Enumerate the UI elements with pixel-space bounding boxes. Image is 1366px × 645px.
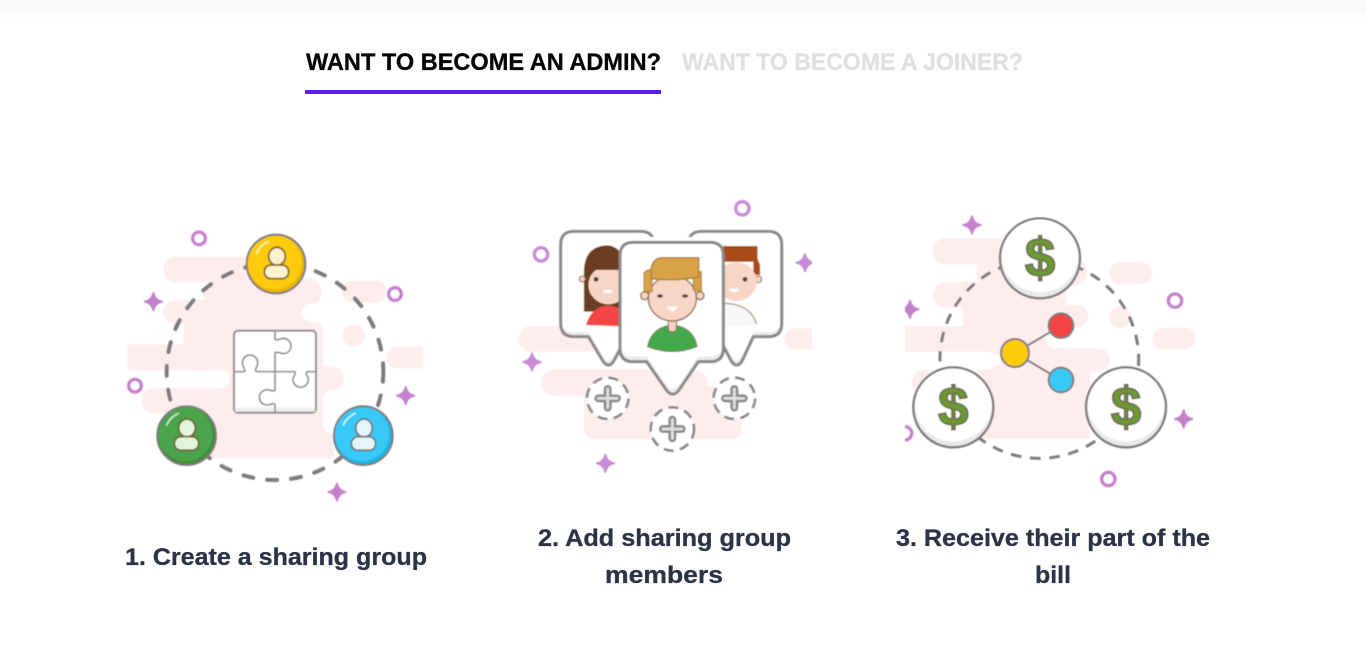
add member placeholders <box>587 378 755 451</box>
sparkles and rings <box>523 202 814 473</box>
caption: step 1: 1. Create a sharing group <box>125 544 427 571</box>
coin: right <box>1086 364 1166 447</box>
inactive tab: joiner: WANT TO BECOME A JOINER? <box>682 49 1023 76</box>
caption: step 2: members <box>605 562 723 589</box>
coin: left: $ <box>938 376 969 438</box>
caption: step 3: bill <box>1035 562 1071 589</box>
sparkles and rings <box>898 216 1193 486</box>
right speech bubble: man <box>688 227 782 365</box>
pink cloud background <box>518 326 831 439</box>
active tab underline <box>305 90 661 94</box>
caption: step 3: 3. Receive their part of the <box>896 525 1210 552</box>
avatar: green <box>157 406 216 465</box>
coin: top <box>1000 215 1080 298</box>
caption: step 2: 2. Add sharing group <box>538 525 791 552</box>
caption: step 2 <box>538 525 791 589</box>
avatar: blue <box>334 406 393 465</box>
pink cloud background <box>120 257 440 458</box>
active tab: admin: WANT TO BECOME AN ADMIN? <box>306 49 661 76</box>
coin: left <box>913 364 993 447</box>
left speech bubble: woman <box>561 227 654 365</box>
caption: step 3 <box>896 525 1210 589</box>
avatar: yellow <box>247 235 305 293</box>
coin: right: $ <box>1111 376 1141 438</box>
panel: step 3 illustration <box>898 215 1196 486</box>
network share icon <box>1001 313 1073 392</box>
dashed ring <box>167 263 383 480</box>
pink cloud background <box>900 238 1196 438</box>
panel: step 1 illustration <box>120 232 440 501</box>
coin: top: $ <box>1025 227 1055 289</box>
sparkles and rings <box>129 232 415 501</box>
dashed ring <box>940 260 1139 458</box>
tabs <box>305 49 1023 94</box>
centre speech bubble: blond man <box>620 237 723 394</box>
panel: step 2 illustration <box>518 202 831 473</box>
puzzle icon <box>234 331 316 413</box>
